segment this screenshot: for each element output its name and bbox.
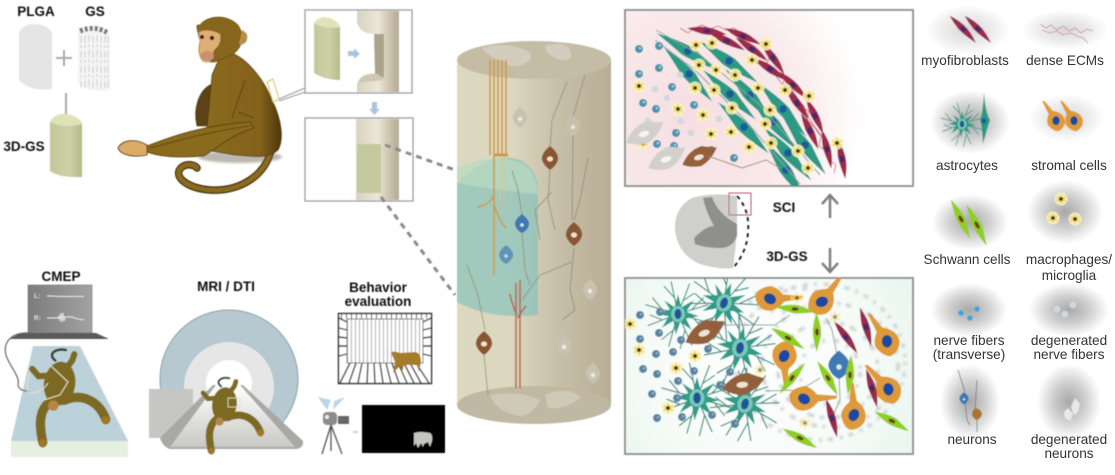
cross-section of spinal cord (675, 193, 751, 268)
legend labels: stromal cells (1031, 158, 1107, 173)
legend labels: Schwann cells (924, 252, 1011, 267)
label GS: GS (85, 4, 105, 19)
arrow down (822, 248, 838, 272)
label SCI: SCI (773, 200, 795, 215)
legend: myofibroblasts (926, 5, 1010, 55)
astrocytes (646, 282, 710, 348)
legend labels: nerve fibers (1033, 347, 1105, 362)
neurons (626, 122, 663, 145)
astrocyte scar (656, 32, 714, 68)
panel: 3D-GS microenvironment (624, 258, 913, 454)
plus sign (56, 50, 72, 66)
label 3D-GS: 3D-GS (766, 249, 808, 264)
panel: behaviour evaluation (318, 280, 445, 454)
stromal cells (754, 285, 804, 312)
red tract (510, 280, 526, 388)
GS cylinder (78, 25, 110, 91)
label: Behavior (349, 280, 408, 295)
legend labels (921, 53, 1112, 461)
laptop: R: (34, 315, 41, 322)
legend labels: degenerated (1031, 333, 1107, 348)
legend: astrocytes (930, 90, 1010, 154)
neurons (513, 107, 527, 128)
legend: degenerated nerve fibres (1029, 283, 1109, 337)
nerve fibres (636, 311, 644, 319)
neurons (685, 319, 725, 345)
inset: graft insertion (279, 10, 412, 101)
inset: graft implanted (305, 118, 413, 201)
implant site marker (267, 79, 279, 102)
Schwann cells (775, 304, 815, 314)
orange tract (477, 60, 508, 275)
label 3D-GS: 3D-GS (3, 139, 45, 154)
legend (926, 5, 1109, 440)
label PLGA: PLGA (17, 4, 55, 19)
laptop (9, 285, 109, 339)
myofibroblasts (834, 321, 858, 354)
legend labels: neurons (1044, 446, 1094, 461)
teal graft region (457, 158, 538, 316)
legend: neurons (940, 364, 1000, 440)
dense ECM fibres (680, 25, 836, 173)
arrow down (65, 93, 67, 114)
scanner bed (160, 385, 303, 449)
legend: macrophages (1027, 180, 1103, 244)
arrow: blue down (369, 102, 380, 115)
legend labels: neurons (947, 432, 997, 447)
legend labels: astrocytes (936, 158, 998, 173)
cage (338, 314, 432, 384)
cylinder: spinal cord segment (457, 41, 611, 424)
monkey on bed (203, 378, 264, 454)
legend: dense ECMs (1021, 10, 1109, 50)
legend: Schwann cells (932, 194, 1008, 250)
dashed connector lines (381, 145, 455, 295)
nerve fibres (635, 45, 643, 53)
legend labels: myofibroblasts (921, 53, 1009, 68)
MRI / DTI label: MRI / DTI (197, 279, 255, 294)
3D-GS cylinder (50, 114, 82, 177)
legend labels: macrophages/ (1026, 252, 1112, 267)
tracking screen (362, 405, 445, 453)
CMEP label: CMEP (41, 269, 81, 284)
electrode cable (5, 333, 30, 392)
panel: scaffold fabrication (3, 4, 110, 177)
panel: SCI microenvironment (622, 10, 913, 202)
legend labels: degenerated (1031, 432, 1107, 447)
label: evaluation (345, 294, 411, 309)
arrow up (822, 195, 838, 218)
panel: CMEP (5, 269, 128, 457)
legend: degenerated neurons (1037, 364, 1101, 440)
axon lines (467, 75, 588, 395)
legend: stromal cells (1029, 94, 1105, 142)
legend labels: dense ECMs (1026, 53, 1104, 68)
video camera (318, 397, 358, 454)
monkey illustration (118, 17, 282, 190)
table (11, 346, 128, 441)
PLGA cylinder (19, 24, 52, 90)
myofibroblasts (687, 25, 727, 36)
anaesthetised monkey (32, 350, 110, 448)
laptop: L: (34, 293, 40, 300)
legend labels: (transverse) (933, 347, 1005, 362)
panel: MRI / DTI (149, 279, 303, 454)
legend: nerve fibres (931, 283, 1007, 337)
axons (720, 315, 840, 418)
legend labels: microglia (1042, 268, 1097, 283)
scaffold debris (735, 284, 905, 440)
macrophages (632, 80, 646, 92)
legend labels: nerve fibers (933, 333, 1005, 348)
macrophages (624, 318, 636, 330)
